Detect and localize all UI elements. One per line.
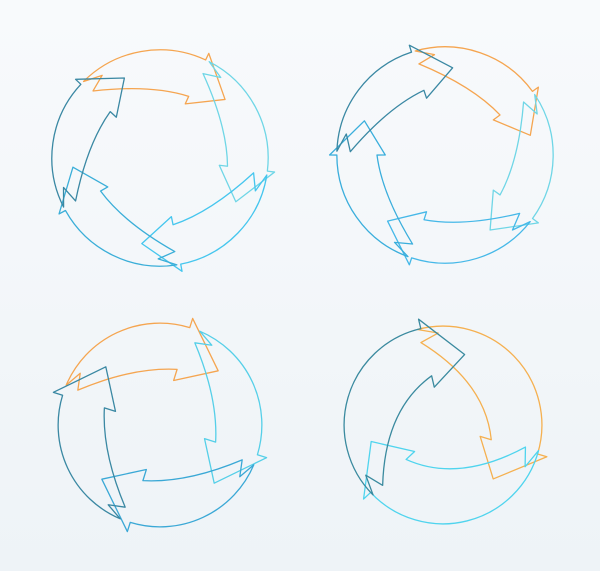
diagram: three-arrow cycle bottom-right	[319, 310, 573, 571]
arrow: orange	[61, 283, 232, 454]
arrow: orange	[412, 46, 540, 136]
arrow: teal	[332, 33, 455, 179]
arrow: orange	[81, 20, 231, 153]
arrow: blue	[88, 396, 259, 567]
arrow: teal	[319, 310, 494, 498]
arrow: light blue	[139, 139, 272, 288]
arrow: light blue	[382, 155, 533, 296]
arrow: teal	[18, 353, 189, 524]
arrow: teal	[39, 72, 143, 208]
arrow: cyan	[339, 362, 548, 571]
diagram: five-arrow cycle top-right	[307, 33, 574, 296]
arrow: cyan	[152, 58, 301, 206]
diagram: four-arrow cycle bottom-left	[18, 283, 302, 567]
arrow: cyan	[131, 326, 302, 497]
diagram: five-arrow cycle top-left	[39, 20, 301, 288]
arrow: cyan	[458, 93, 574, 236]
arrow: orange	[385, 317, 573, 491]
arrow: blue	[53, 166, 189, 270]
arrow: blue	[307, 117, 457, 261]
